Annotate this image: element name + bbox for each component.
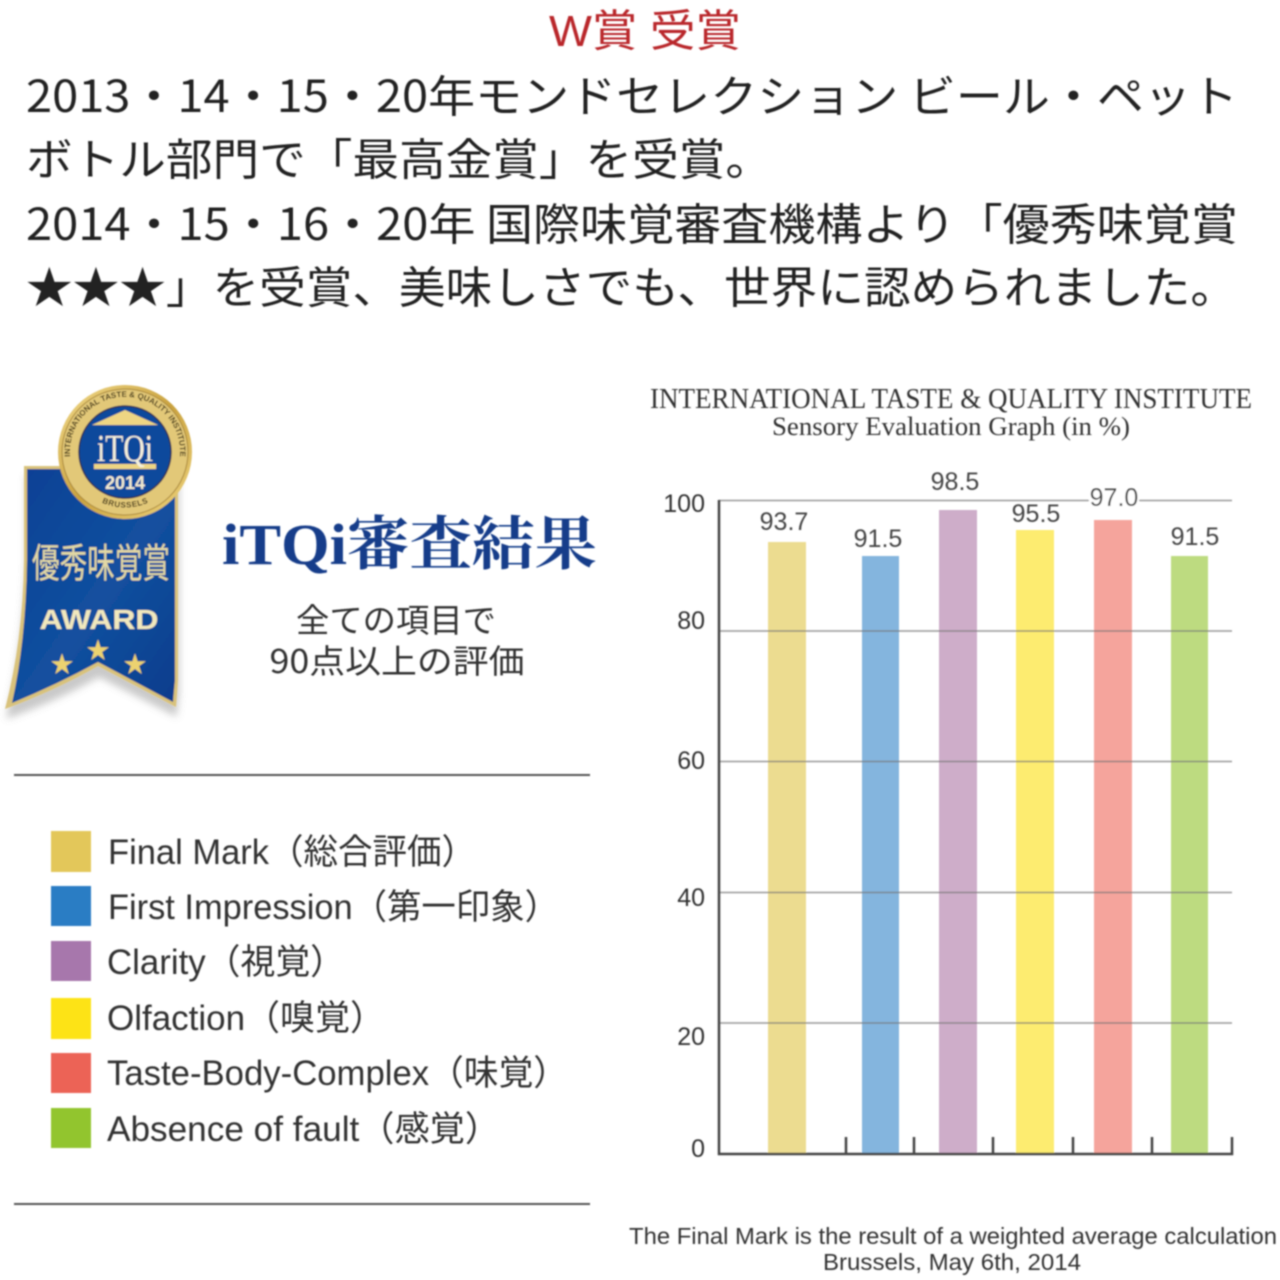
chart heading: Sensory Evaluation Graph (in %) [772, 412, 1130, 441]
chart footnote [629, 1223, 1277, 1275]
icon: iTQi award ribbon badge: ★ [86, 637, 110, 663]
value labels: 93.7 [760, 508, 808, 536]
legend item: First Impression: First Impression（第一印象） [108, 888, 559, 927]
icon: iTQi award ribbon badge: 2014 [105, 473, 145, 493]
bar: Taste-Body-Complex 97.0 [1094, 520, 1132, 1154]
icon: iTQi award ribbon badge: AWARD [40, 604, 158, 635]
legend item: Taste-Body-Complex: Taste-Body-Complex（味覚） [107, 1054, 568, 1093]
icon: iTQi award ribbon badge: ★ [124, 651, 146, 677]
heading: iTQi results: iTQi審査結果 [222, 512, 597, 577]
axis labels: 40 [677, 884, 705, 912]
title: W賞 受賞 [549, 7, 741, 56]
legend [51, 831, 568, 1149]
legend item: Clarity: Clarity（視覚） [107, 943, 345, 982]
bar: First Impression 91.5 [862, 556, 899, 1154]
value labels: 95.5 [1012, 500, 1060, 528]
bar: Clarity 98.5 [939, 510, 977, 1154]
intro text block [26, 61, 1238, 316]
text block: rating note [270, 594, 524, 683]
icon: iTQi award ribbon badge: INTERNATIONAL TASTE & QUALITY INSTITUTE [64, 390, 186, 458]
value labels: 97.0 [1090, 484, 1138, 512]
bar: Final Mark 93.7 [768, 542, 806, 1154]
value labels: 91.5 [1171, 523, 1219, 551]
icon: iTQi award ribbon badge: ★ [50, 651, 74, 677]
intro text block: 2013・14・15・20年モンドセレクション ビール・ペット [26, 61, 1238, 125]
axis labels: 80 [677, 607, 705, 635]
axis labels: 100 [663, 490, 705, 518]
text block: rating note: 全ての項目で [296, 594, 496, 642]
chart footnote: Brussels, May 6th, 2014 [823, 1249, 1081, 1275]
intro text block: 2014・15・16・20年 国際味覚審査機構より「優秀味覚賞 [26, 189, 1238, 253]
value labels: 91.5 [854, 525, 902, 553]
value labels [760, 468, 1219, 553]
axis labels: 0 [691, 1135, 705, 1163]
intro text block: ★★★」を受賞、美味しさでも、世界に認められました。 [26, 252, 1237, 316]
legend item: Olfaction: Olfaction（嗅覚） [107, 999, 385, 1038]
intro text block: ボトル部門で「最高金賞」を受賞。 [26, 124, 772, 188]
chart heading: INTERNATIONAL TASTE & QUALITY INSTITUTE [650, 384, 1252, 415]
axis labels [663, 490, 705, 1163]
bar: Olfaction 95.5 [1016, 530, 1054, 1154]
axis labels: 20 [677, 1023, 705, 1051]
legend item: Absence of fault: Absence of fault（感覚） [107, 1110, 500, 1149]
chart footnote: The Final Mark is the result of a weighted average calculation [629, 1223, 1277, 1249]
icon: iTQi award ribbon badge: 優秀味覚賞 [32, 531, 170, 589]
bar: Absence of fault 91.5 [1171, 556, 1208, 1154]
legend item: Final Mark: Final Mark（総合評価） [108, 833, 476, 872]
icon: iTQi award ribbon badge: iTQi [97, 428, 153, 470]
value labels: 98.5 [931, 468, 979, 496]
icon: iTQi award ribbon badge: BRUSSELS [102, 497, 148, 508]
bar chart [663, 468, 1232, 1163]
icon: iTQi award ribbon badge [4, 384, 193, 720]
chart heading [650, 384, 1252, 441]
text block: rating note: 90点以上の評価 [270, 635, 524, 683]
axis labels: 60 [677, 747, 705, 775]
